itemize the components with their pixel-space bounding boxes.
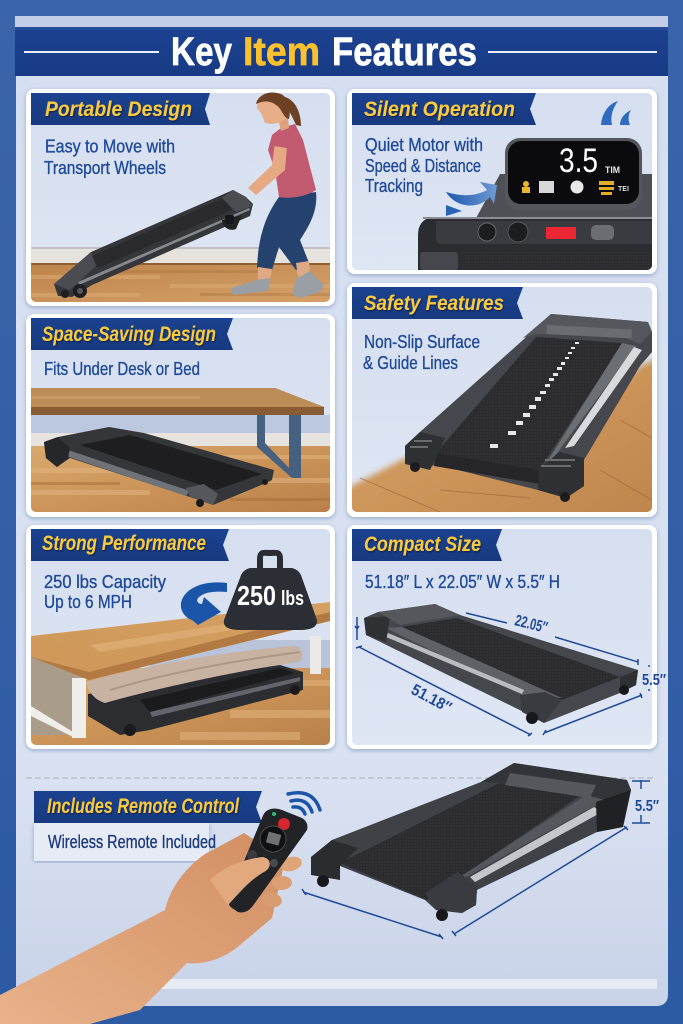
banner: space-saving design: Space-Saving Design — [42, 323, 216, 346]
illustration: treadmill under desk with blanket — [86, 646, 303, 736]
illustration: thumb — [210, 857, 270, 905]
banner: includes remote control: Wireless Remote Included — [48, 832, 216, 852]
panel: silent operation — [347, 89, 657, 274]
icon: sound waves — [601, 101, 631, 125]
panel: includes remote control — [0, 763, 659, 1024]
icon: 250 lbs weight: lbs — [281, 588, 304, 610]
dimensions: width, length, height: 5.5″ — [642, 672, 666, 689]
banner: includes remote control: Includes Remote Control — [47, 795, 240, 818]
banner: safety features — [352, 287, 523, 319]
text: safety features: Non-Slip Surface — [364, 332, 480, 352]
top light strip — [15, 16, 668, 27]
text: compact size dimensions: 51.18″ L x 22.05″ W x 5.5″ H — [365, 572, 560, 592]
icon: 250 lbs weight: 250 — [237, 580, 276, 611]
text: portable design: Transport Wheels — [44, 158, 166, 178]
illustration: wooden desktop — [31, 602, 330, 680]
banner: space-saving design — [31, 318, 233, 350]
banner: silent operation: Silent Operation — [364, 98, 515, 121]
panel: strong performance — [26, 525, 335, 749]
panel: safety features — [344, 282, 660, 521]
illustration: woman pushing tilted treadmill — [54, 92, 324, 298]
banner: silent operation — [352, 93, 536, 125]
text: strong performance — [44, 572, 166, 612]
text: safety features — [363, 332, 480, 373]
banner: safety features: Safety Features — [364, 292, 504, 315]
banner: portable design: Portable Design — [45, 98, 192, 121]
panel: portable design — [26, 89, 335, 306]
text: portable design: Easy to Move with — [45, 136, 175, 156]
illustration: treadmill with dimensions — [364, 604, 638, 724]
display: speed readout: TIM — [605, 165, 620, 175]
display: speed readout: 3.5 — [559, 142, 598, 180]
dimensions: width, length, height: 22.05″ — [513, 612, 549, 637]
illustration: console close-up — [418, 174, 652, 270]
banner: compact size — [352, 529, 502, 561]
title banner — [15, 27, 668, 76]
text: strong performance: Up to 6 MPH — [44, 592, 132, 612]
title banner: Key — [171, 30, 233, 74]
illustration: hand and arm — [0, 833, 303, 1024]
display: speed readout: TEI — [618, 186, 629, 193]
text: silent operation — [365, 135, 483, 196]
banner: includes remote control — [34, 791, 262, 861]
banner: compact size: Compact Size — [364, 533, 481, 556]
title banner: Features — [332, 30, 477, 74]
text: portable design — [44, 136, 175, 178]
panel: compact size — [347, 525, 666, 749]
text: space-saving design: Fits Under Desk or Bed — [44, 359, 200, 379]
text: silent operation: Quiet Motor with — [365, 135, 483, 155]
text: strong performance: 250 lbs Capacity — [44, 572, 166, 592]
illustration: low-profile treadmill — [44, 427, 274, 507]
title banner: Item — [243, 30, 320, 74]
display: speed readout — [505, 138, 642, 210]
icon: curved arrow — [181, 582, 227, 625]
text: silent operation: Tracking — [365, 176, 423, 196]
icon: remote control — [228, 808, 307, 912]
text: silent operation: Speed & Distance — [365, 156, 481, 176]
illustration: desk — [31, 388, 324, 478]
text: safety features: & Guide Lines — [363, 353, 458, 373]
banner: strong performance — [31, 529, 229, 561]
icon: curved blue arrow — [446, 182, 497, 216]
illustration: treadmill with guide lines — [405, 314, 652, 502]
icon: wifi signal — [288, 793, 320, 814]
banner: portable design — [31, 93, 210, 125]
dimensions: length, width, height — [302, 780, 659, 939]
dimensions: length, width, height: 5.5″ — [635, 798, 659, 815]
icon: 250 lbs weight — [224, 553, 317, 630]
panel: space-saving design — [26, 314, 335, 517]
illustration: treadmill with dimensions — [311, 763, 631, 921]
dimensions: width, length, height: 51.18″ — [408, 682, 454, 717]
dimensions: width, length, height — [355, 612, 666, 736]
banner: strong performance: Strong Performance — [42, 532, 206, 555]
